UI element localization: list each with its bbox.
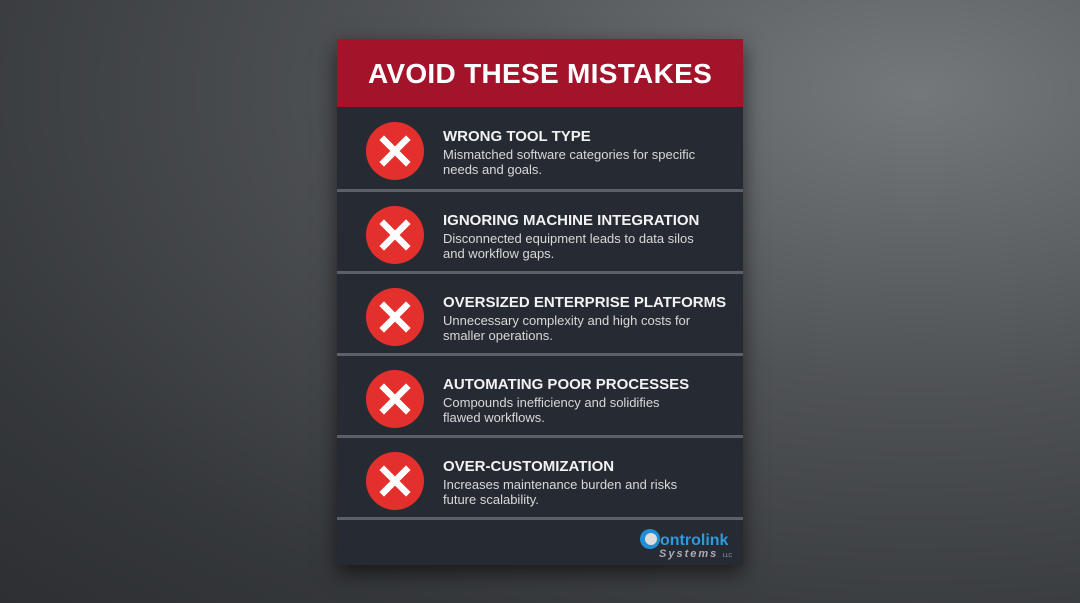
icon: x [366,452,424,510]
heading: OVERSIZED ENTERPRISE PLATFORMS [443,294,726,311]
text: Unnecessary complexity and high costs for smaller operations. [443,313,690,343]
heading: AUTOMATING POOR PROCESSES [443,376,689,393]
heading: WRONG TOOL TYPE [443,128,591,145]
logo: ontrolink [660,532,729,549]
item: enterprise platforms [337,274,743,354]
poster [337,39,743,565]
logo: Systems [659,548,718,560]
logo: LLC [723,553,733,559]
text: Increases maintenance burden and risks future scalability. [443,477,677,507]
icon: x [366,122,424,180]
item: poor processes [337,356,743,436]
title: AVOID THESE MISTAKES [368,58,712,89]
title [337,39,743,107]
item: machine integration [337,192,743,272]
logo [640,529,733,560]
icon: x [366,206,424,264]
icon: x [366,288,424,346]
text: Mismatched software categories for specific needs and goals. [443,147,695,177]
text: Compounds inefficiency and solidifies flawed workflows. [443,395,660,425]
heading: OVER-CUSTOMIZATION [443,458,614,475]
heading: IGNORING MACHINE INTEGRATION [443,212,699,229]
text: Disconnected equipment leads to data silos and workflow gaps. [443,231,694,261]
item: wrong tool type [337,108,743,188]
icon: x [366,370,424,428]
item: over-customization [337,438,743,518]
